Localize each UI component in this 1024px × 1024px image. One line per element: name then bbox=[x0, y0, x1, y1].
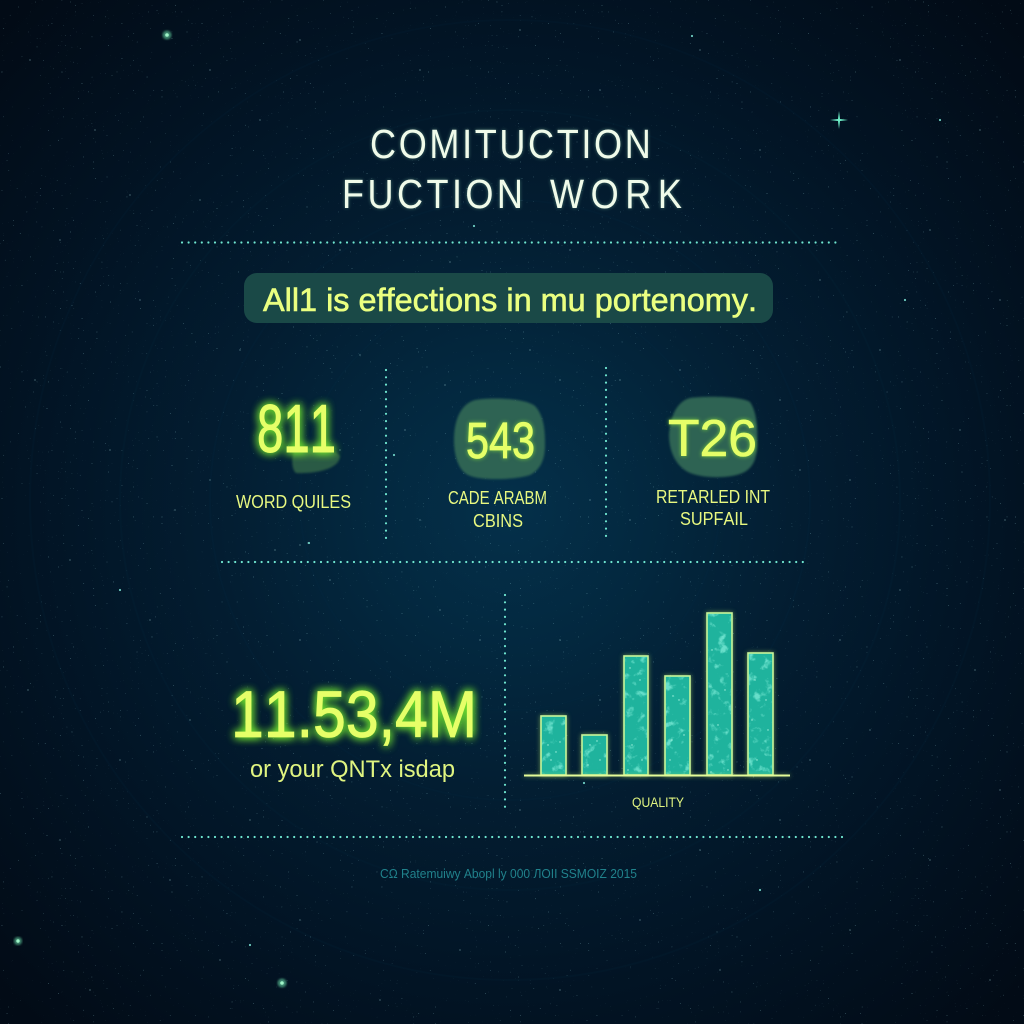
stat: 543 cade arabm cbins bbox=[448, 398, 547, 531]
big number block bbox=[231, 677, 477, 783]
stat: T26 retarled int supfail: RETARLED INT bbox=[656, 487, 770, 507]
title: COMITUCTION bbox=[370, 122, 651, 168]
star: bottom glow bbox=[278, 978, 286, 988]
stat: 811 word quiles bbox=[236, 391, 351, 512]
divider: vertical right bbox=[605, 368, 607, 540]
star: top-right sparkle bbox=[830, 111, 848, 129]
chart baseline bbox=[524, 774, 790, 776]
stat: 811 word quiles: WORD QUILES bbox=[236, 492, 351, 512]
title: FUCTION bbox=[342, 172, 523, 218]
stat: 543 cade arabm cbins: CBINS bbox=[473, 511, 523, 531]
divider: vertical left bbox=[385, 370, 387, 540]
title: WORK bbox=[550, 172, 682, 218]
subtitle banner bbox=[244, 273, 773, 323]
stat: T26 retarled int supfail: T26 bbox=[668, 410, 757, 468]
chart label: QUALITY bbox=[632, 795, 684, 810]
star: top-left glow bbox=[162, 30, 172, 40]
stat: 811 word quiles: 811 bbox=[257, 391, 336, 467]
title bbox=[342, 122, 682, 218]
bar chart bbox=[524, 613, 790, 810]
divider: middle dotted bbox=[222, 561, 803, 563]
divider: top dotted bbox=[182, 241, 842, 244]
stat: 543 cade arabm cbins: 543 bbox=[466, 412, 535, 469]
divider: vertical chart bbox=[504, 595, 506, 810]
divider: bottom dotted bbox=[182, 836, 843, 838]
stat: T26 retarled int supfail: SUPFAIL bbox=[680, 509, 748, 529]
subtitle banner: Аll1 is effections in mu portenomy. bbox=[263, 282, 757, 318]
big number block: 11.53,4M bbox=[231, 677, 477, 751]
stat: T26 retarled int supfail bbox=[656, 397, 770, 529]
star: lower-left glow bbox=[14, 937, 22, 945]
footer text: CΩ Ratemuiwy Abopl ly 000 ЛОII SSMOIZ 2015 bbox=[380, 866, 637, 881]
stat: 543 cade arabm cbins: CADE ARABM bbox=[448, 488, 547, 508]
big number block: or your QNTx isdap bbox=[250, 756, 455, 783]
